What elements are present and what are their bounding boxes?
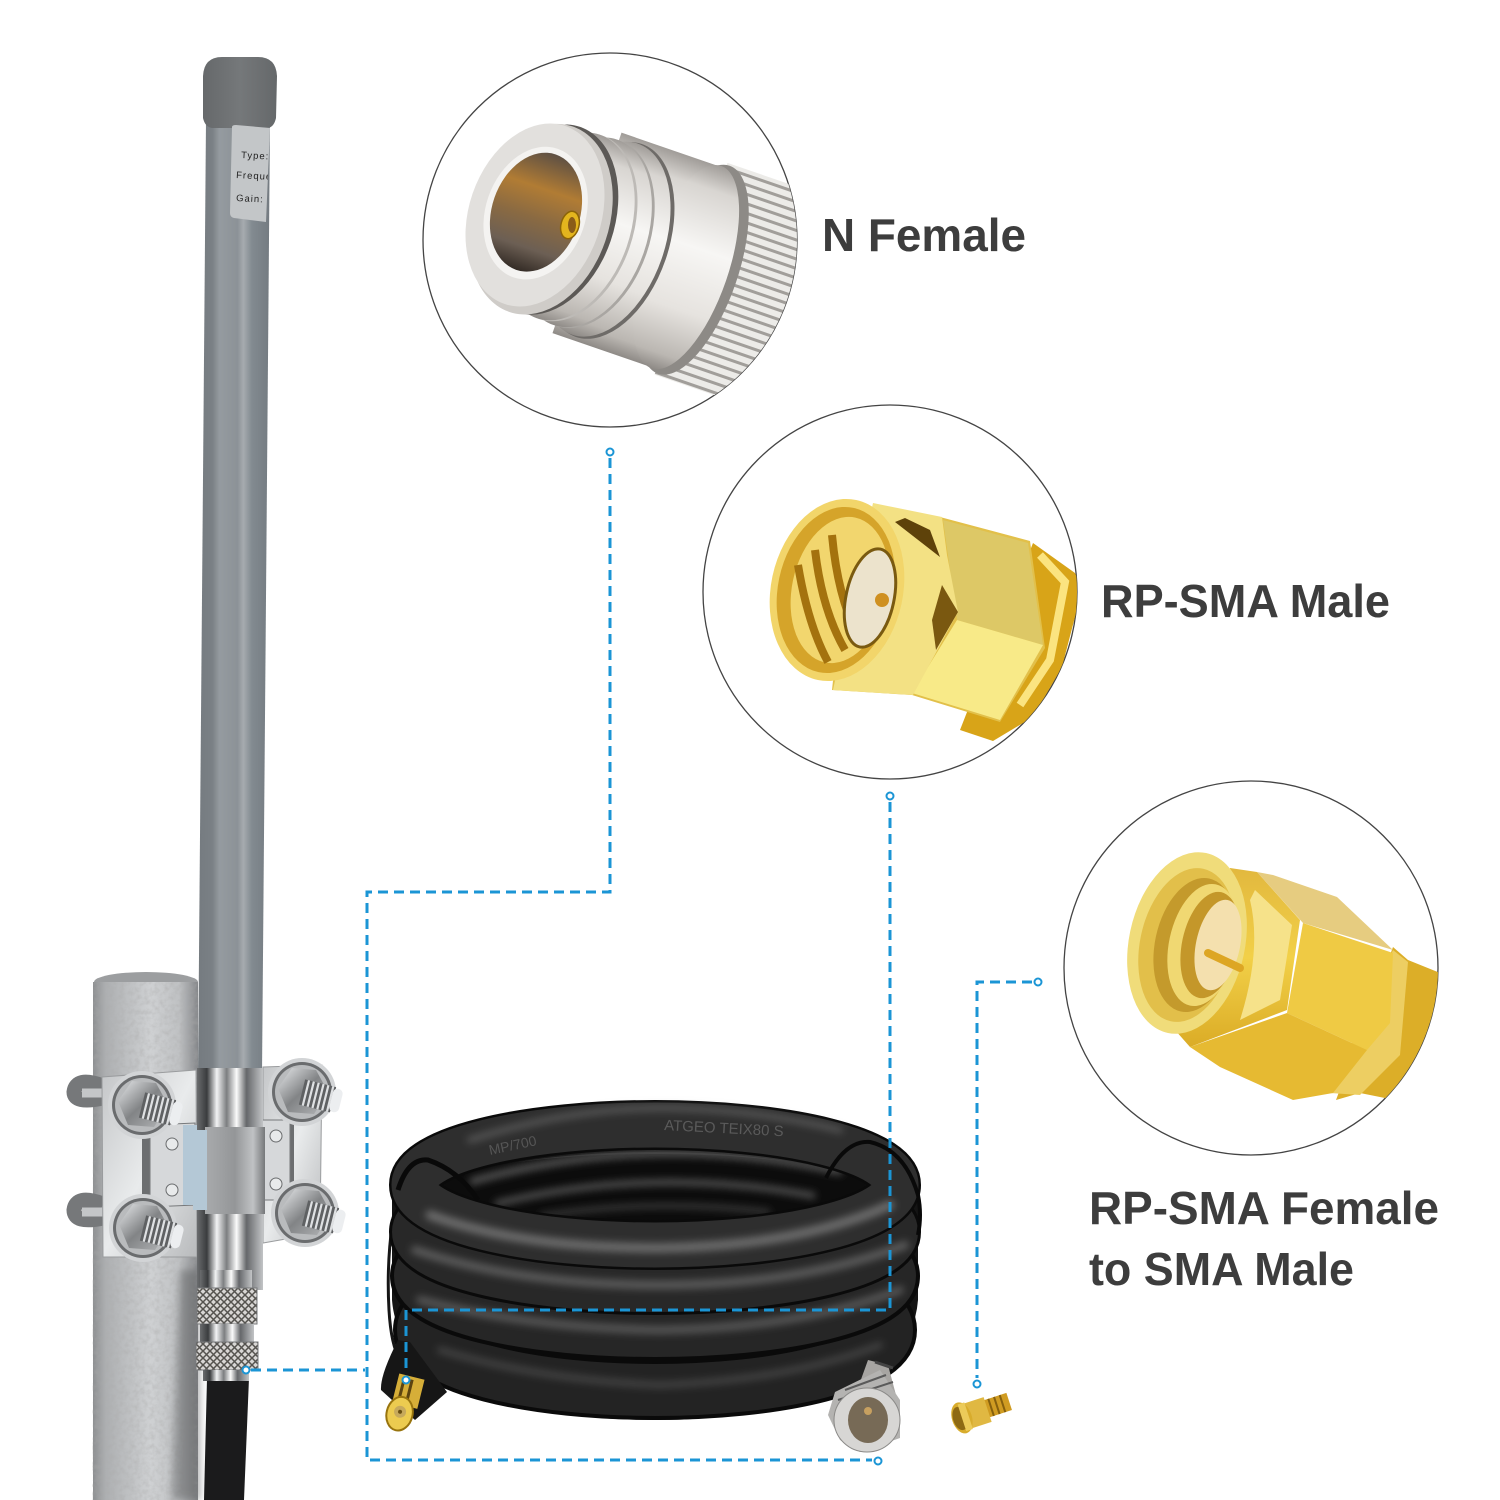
antenna label: Frequency [236,170,290,184]
bolts [108,1058,347,1262]
cable print: MP/700 [487,1132,538,1158]
cable ties [398,1160,478,1200]
mounting bracket [102,1058,347,1262]
RP-SMA end of cable [381,1340,447,1434]
small adapter [947,1387,1014,1436]
coil of cable [388,1108,920,1420]
antenna cap [203,57,277,128]
label: RP-SMA Male: RP-SMA Male [1101,575,1390,627]
antenna label: Type:5 [241,150,276,163]
N female end of cable [828,1360,900,1452]
label: RP-SMA Female to SMA Male: to SMA Male [1089,1243,1354,1295]
antenna label [230,125,270,222]
U-bolts [74,1082,103,1220]
N female detail circle [422,52,798,428]
coil highlights [415,1108,905,1385]
callout dots [242,448,1042,1464]
RP-SMA male detail circle [703,405,1082,779]
cable under antenna [204,1378,249,1500]
cable print: ATGEO TEIX80 S [664,1117,784,1140]
thin wire [388,1175,402,1360]
clamp tube [193,1068,265,1290]
N connectors on antenna [196,1270,258,1381]
dashed connector lines [251,458,1032,1460]
antenna shaft [198,120,270,1075]
cable print [487,1117,784,1158]
label: RP-SMA Female to SMA Male [1089,1182,1439,1295]
pole [92,972,200,1500]
label: N Female: N Female [822,209,1026,261]
label: RP-SMA Female to SMA Male: RP-SMA Female [1089,1182,1439,1234]
SMA male detail circle [1064,781,1445,1155]
antenna label: Gain: 6 [236,193,274,206]
